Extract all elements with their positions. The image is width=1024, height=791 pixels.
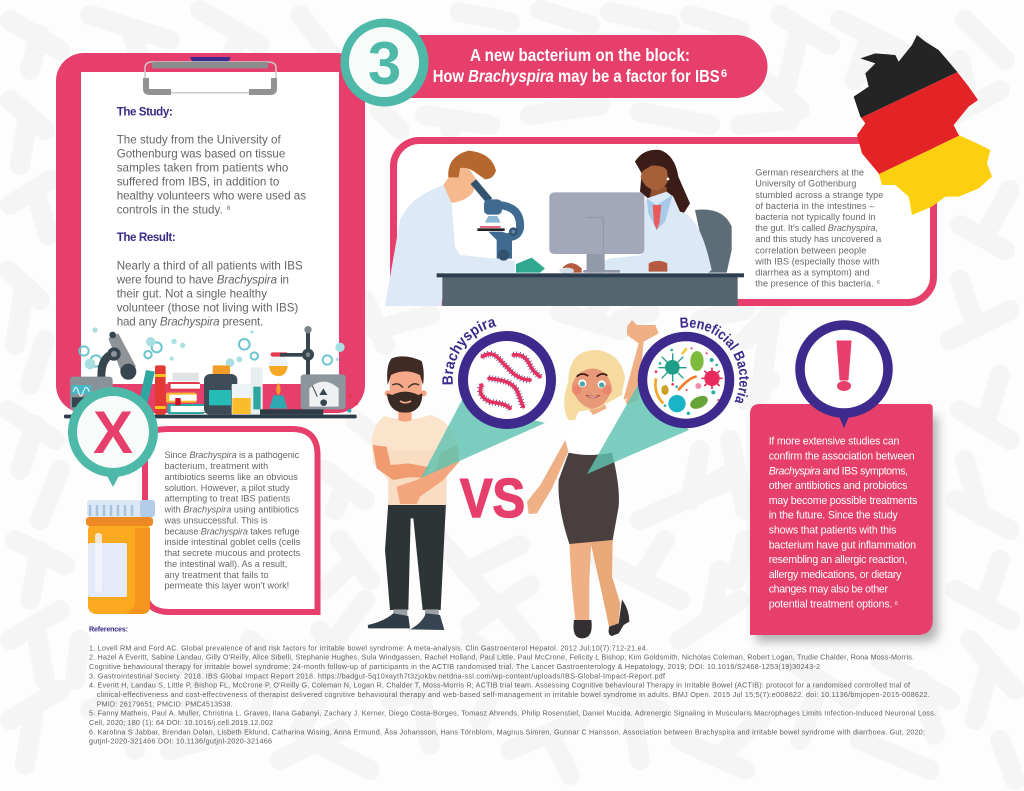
illustration: laboratory equipment on shelf (64, 326, 358, 418)
text: german researchers: diarrhea as a symptom) and (755, 268, 870, 278)
text: antibiotics explanation: inside intestinal goblet cells (cells (164, 537, 301, 547)
text: antibiotics explanation: bacterium, treatment with (164, 461, 268, 471)
panel frame (394, 140, 934, 302)
references heading: References: (89, 625, 128, 634)
text: german researchers: correlation between people (755, 245, 866, 255)
illustration: woman waving (527, 320, 659, 638)
text: future treatments: 6 (895, 601, 898, 607)
legs and shoes (569, 540, 629, 638)
badge: number 3 (340, 18, 428, 106)
title text (433, 45, 727, 86)
text: german researchers (754, 168, 883, 289)
heading: the result: The Result: (117, 231, 176, 244)
text: german researchers: and this study has uncovered a (755, 234, 882, 244)
references list: clinical-effectiveness and cost-effectiveness of therapist delivered cognitive behavioural therapy and web-based self-management in irritable bowel syndrome in adults. BMJ Open. 2015 Jul 15;5(7):e008622. doi: 10.1136/bmjopen-2015-008622. (97, 690, 930, 699)
icon: x badge (68, 387, 158, 487)
text: german researchers: stumbled across a strange type (755, 190, 883, 200)
text: antibiotics explanation: with Brachyspira using antibiotics (164, 505, 299, 515)
male scientist (385, 151, 545, 306)
text: german researchers: bacteria not typically found in (755, 212, 876, 222)
female scientist (559, 150, 732, 274)
arms and hands (373, 445, 430, 480)
text: result description: volunteer (those not living with IBS) (117, 302, 298, 314)
text: study description: samples taken from patients who (117, 162, 288, 174)
map: germany flag (854, 35, 992, 215)
text: antibiotics explanation: that secrete mucous and protects (164, 548, 301, 558)
title banner (410, 35, 768, 98)
arms (527, 440, 572, 514)
text: antibiotics explanation: the intestinal wall). As a result, (164, 559, 287, 569)
trousers and shoes (368, 503, 446, 630)
references list: 5. Fanny Matheis, Paul A. Muller, Christina L. Graves, Ilana Gabanyi, Zachary J. Kerner, Diego Costa-Borges, Tomasz Ahrends, Philip Rosenstiel, Daniel Mucida. Adrenergic Signaling in Muscularis Macrophages Limits Infection-Induced Neuronal Loss. (89, 709, 936, 718)
text: german researchers: University of Gothenburg (755, 179, 856, 189)
callout: antibiotics x marker (145, 429, 318, 612)
text: future treatments: allergy medications, or dietary (769, 569, 902, 581)
blouse (565, 398, 627, 453)
text: antibiotics explanation: because Brachyspira takes refuge (164, 526, 300, 536)
card shadow (756, 416, 938, 642)
text: german researchers: the gut. It’s called Brachyspira, (755, 223, 878, 233)
retort stand and gauge (280, 326, 358, 413)
text: study description: Gothenburg was based on tissue (117, 148, 285, 160)
text: antibiotics explanation (164, 450, 301, 591)
microbes (655, 347, 723, 415)
text: future treatments: other antibiotics and probiotics (769, 480, 907, 492)
references list: 3. Gastrointestinal Society. 2018. IBS Global Impact Report 2018. https://badgut-5q10xayth7t3zjokbv.netdna-ssl.com/wp-content/uploads/IBS-Global-Impact-Report.pdf (89, 671, 665, 680)
skirt (558, 453, 619, 544)
text: antibiotics explanation: was unsuccessful. This is (164, 515, 268, 525)
computer monitor (549, 192, 644, 273)
references list: PMID: 26179651; PMCID: PMC4513538. (97, 699, 233, 708)
text: future treatments: resembling an allergic reaction, (769, 554, 907, 566)
text: future treatments: potential treatment options. (769, 598, 892, 610)
title text: 6 (721, 68, 727, 80)
text: future treatments: If more extensive studies can (769, 436, 899, 448)
text: study description: The study from the University of (117, 134, 281, 146)
text: german researchers: German researchers at the (755, 168, 864, 178)
references list: Cell, 2020; 180 (1): 64 DOI: 10.1016/j.cell.2019.12.002 (89, 718, 273, 727)
title text: A new bacterium on the block: (470, 45, 690, 65)
references list: gutjnl-2020-321466 DOI: 10.1136/gutjnl-2020-321466 (89, 737, 272, 746)
label: beneficial bacteria: Beneficial Bacteria (680, 318, 749, 404)
text: future treatments: shows that patients with this (769, 524, 896, 536)
callout: future treatments (750, 325, 938, 642)
clipboard clip (143, 57, 277, 95)
badge: number 3: 3 (368, 30, 401, 97)
text: german researchers: of bacteria in the intestines – (755, 201, 875, 211)
icon: exclamation badge (800, 325, 888, 428)
references list: Cognitive behavioural therapy for irritable bowel syndrome: 24-month follow-up of participants in the ACTIB randomised trial. The Lancet Gastroenterology & Hepatology, 2019; DOI: 10.1016/S2468-1253(19)30243-2 (89, 662, 820, 671)
panel frame (145, 429, 318, 612)
text: german researchers: with IBS (especially those with (754, 256, 879, 266)
heading: the study: The Study: (117, 106, 173, 118)
references list (89, 643, 936, 746)
text: future treatments (769, 436, 917, 610)
panel: clipboard study and result (56, 53, 365, 413)
references list: 1. Lovell RM and Ford AC. Global prevalence of and risk factors for irritable bowel syndrome: A meta-analysis. Clin Gastroenterol Hepatol. 2012 Jul;10(7):712-21.e4. (89, 643, 648, 652)
text: future treatments: confirm the association between (769, 450, 915, 462)
head and hair (564, 350, 625, 420)
magnifier cone: brachyspira (421, 400, 545, 478)
text: result description: had any Brachyspira present. (117, 316, 263, 328)
microscope (473, 182, 520, 261)
text: study description: suffered from IBS, in addition to (117, 176, 279, 188)
text: antibiotics explanation: any treatment that fails to (164, 570, 268, 580)
card (750, 404, 933, 635)
icon: beneficial bacteria circle (642, 336, 730, 424)
text: result description: their gut. Not a single healthy (117, 288, 267, 300)
text: study description: controls in the study. (117, 204, 223, 216)
text: future treatments: changes may also be other (769, 584, 888, 596)
vs label: VS (460, 467, 525, 529)
references list: 4. Everitt H, Landau S, Little P, Bishop FL, McCrone P, O'Reilly G, Coleman N, Logan R, Chalder T, Moss-Morris R; ACTIB trial team. Assessing Cognitive behavioural Therapy in Irritable Bowel (ACTIB): protocol for a randomised controlled trial of (89, 681, 910, 690)
references (89, 625, 936, 746)
text: antibiotics explanation: antibiotics seems like an obvious (164, 472, 298, 482)
text: antibiotics explanation: attempting to treat IBS patients (164, 494, 291, 504)
molecules and bubbles (79, 339, 332, 367)
text: german researchers: the presence of this bacteria. (755, 279, 874, 289)
text: study description (117, 134, 306, 216)
text: antibiotics explanation: solution. However, a pilot study (164, 483, 290, 493)
references list: 2. Hazel A Everitt, Sabine Landau, Gilly O'Reilly, Alice Sibelli, Stephanie Hughes, Sula Windgassen, Rachel Holland, Paul Little, Paul McCrone, Felicity L Bishop, Kim Goldsmith, Nicholas Coleman, Robert Logan, Trudie Chalder, Rona Moss-Morris. (89, 653, 914, 662)
text: future treatments: bacterium have gut inflammation (769, 539, 916, 551)
text: future treatments: Brachyspira and IBS symptoms, (769, 465, 908, 477)
text: german researchers: 6 (877, 280, 880, 286)
text: study description: healthy volunteers who were used as (117, 190, 306, 202)
text: future treatments: may become possible treatments (769, 495, 917, 507)
desk (437, 273, 744, 306)
shelf (64, 415, 357, 418)
banner shape (410, 35, 768, 98)
icon: x badge: X (93, 399, 133, 466)
panel: german researchers (394, 140, 934, 302)
shirt (372, 415, 459, 505)
oscilloscope (70, 377, 113, 410)
references list: 6. Karolina S Jabbar, Brendan Dolan, Lisbeth Eklund, Catharina Wising, Anna Ermund, Åsa Johansson, Hans Törnblom, Magnus Simren, Gunnar C Hansson. Association between Brachyspira and irritable bowel syndrome with diarrhoea. Gut, 2020; (89, 727, 925, 736)
text: result description: were found to have Brachyspira in (116, 274, 289, 286)
flask, books and jars (139, 352, 288, 415)
clipboard board (56, 53, 365, 413)
icon: brachyspira circle (463, 336, 551, 424)
text: antibiotics explanation: permeate this layer won’t work! (164, 581, 289, 591)
icon: pill bottle (86, 500, 155, 614)
magnifier cone: beneficial bacteria (587, 383, 689, 474)
text: result description: Nearly a third of all patients with IBS (117, 260, 303, 272)
title text: How Brachyspira may be a factor for IBS (433, 66, 720, 86)
label: brachyspira: Brachyspira (442, 319, 496, 384)
text: antibiotics explanation: Since Brachyspira is a pathogenic (164, 450, 300, 460)
illustration: scientists at a desk (385, 150, 744, 306)
clipboard paper (81, 72, 339, 384)
text: study description: 6 (227, 206, 231, 212)
head and beard (385, 356, 427, 422)
illustration: man with stomach pain (368, 356, 459, 630)
bacteria worms (480, 354, 540, 408)
text: result description (116, 260, 303, 328)
text: future treatments: in the future. Since the study (769, 510, 898, 522)
microscope (101, 332, 136, 382)
